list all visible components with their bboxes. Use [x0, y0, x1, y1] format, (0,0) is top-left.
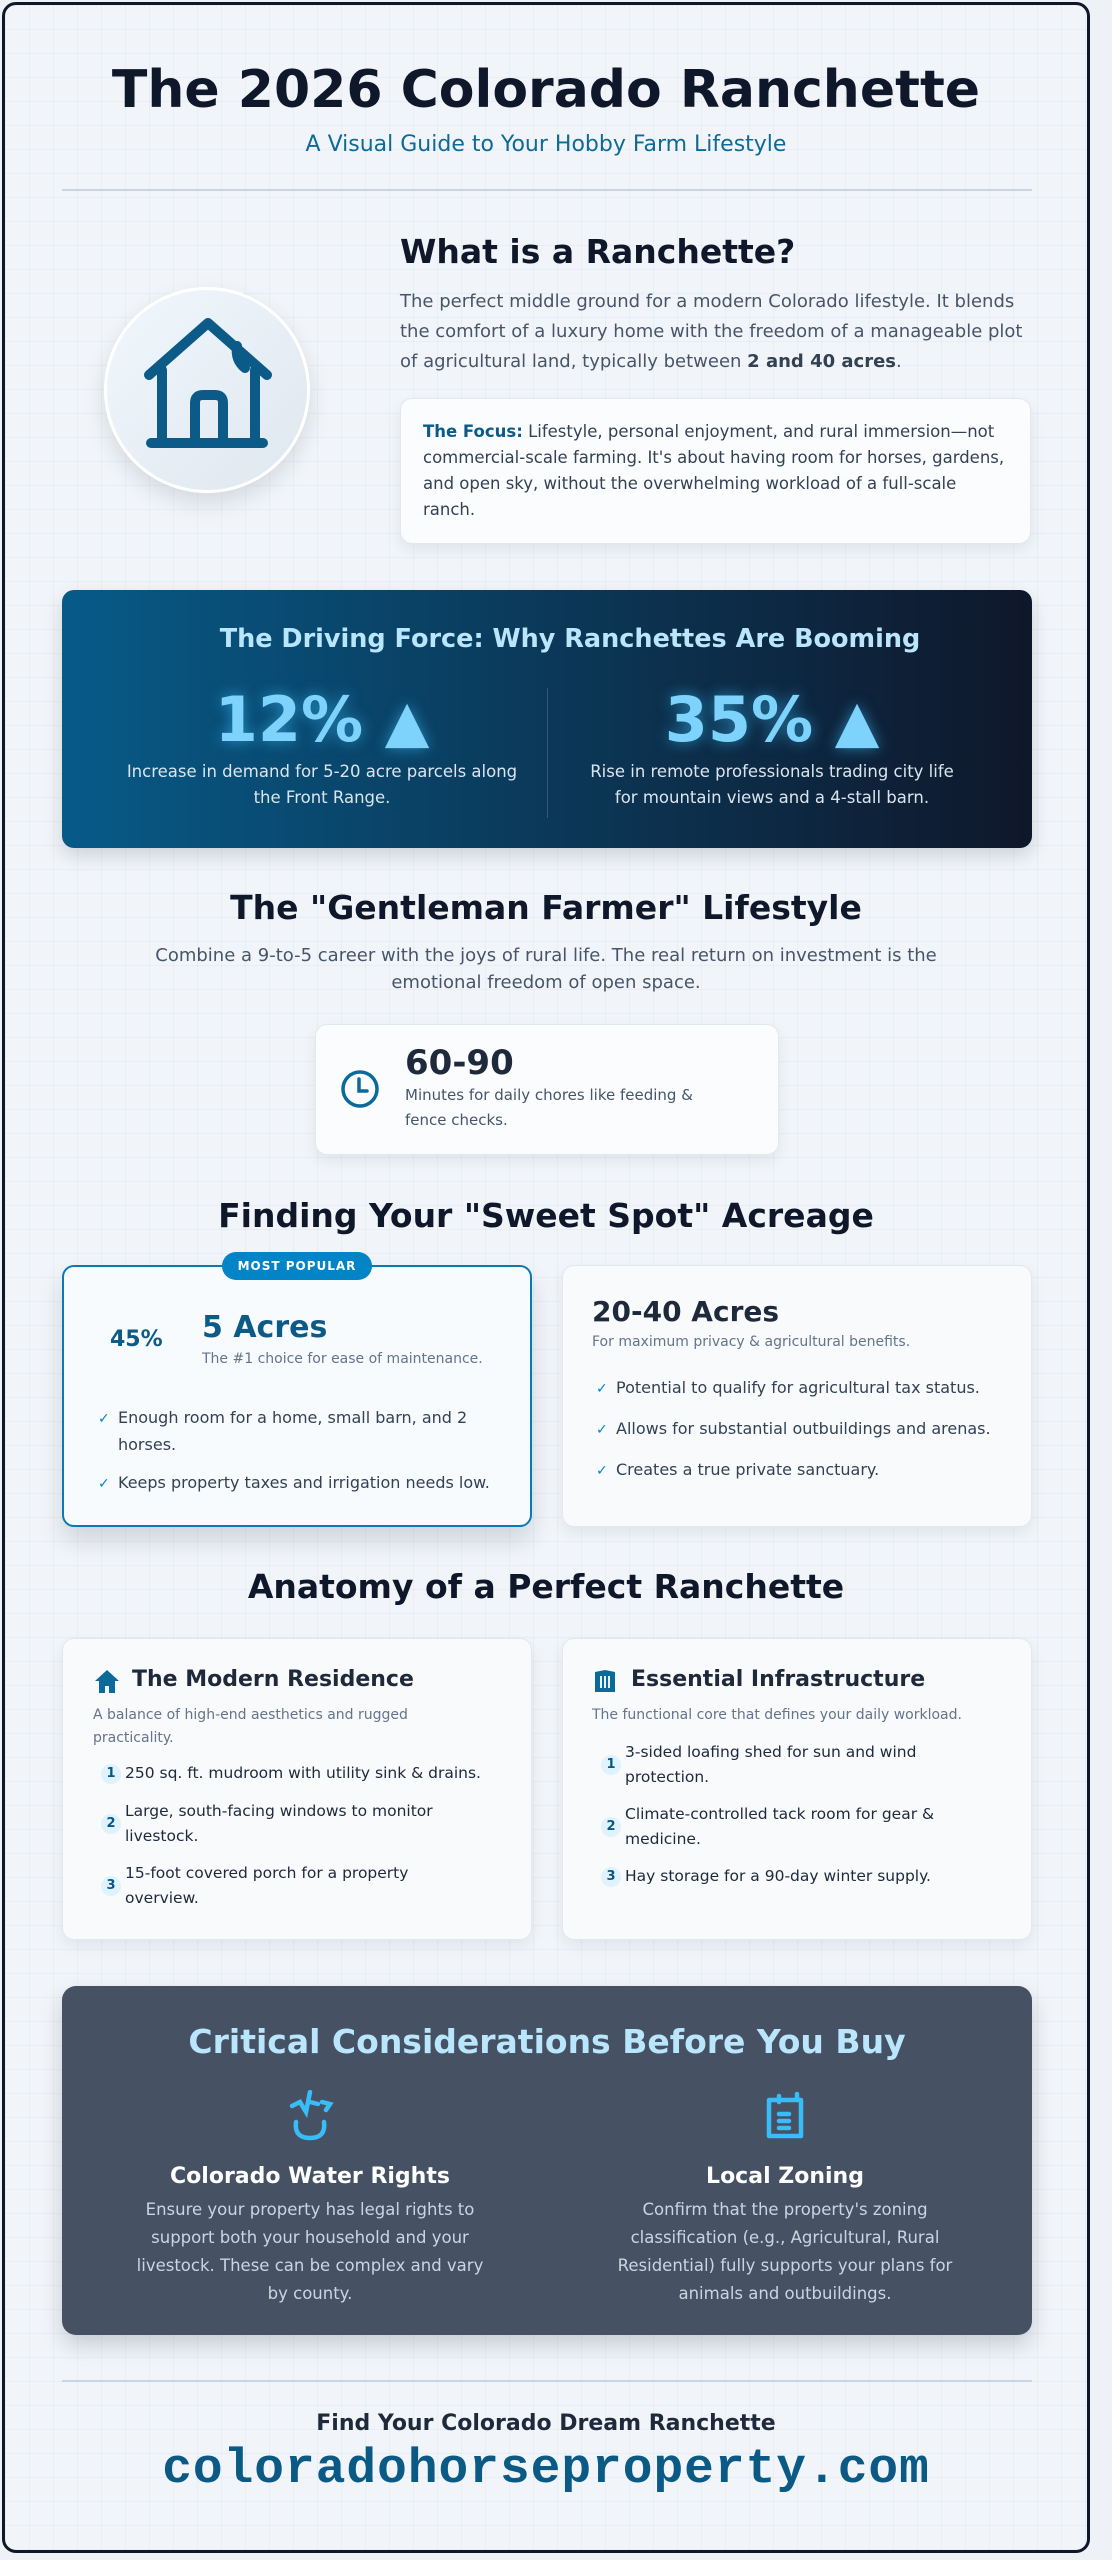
stat: 35%: 35% ▲ — [665, 683, 879, 756]
stat: 35% — [590, 683, 954, 807]
card: 20-40 acres: ✓ — [596, 1422, 608, 1438]
callout: the focus — [400, 398, 1031, 544]
card: 5 acres — [62, 1265, 532, 1527]
text: gentleman farmer: Combine a 9-to-5 career with the joys of rural life. The real return on investment is the emotional freedom of open space. — [155, 945, 937, 993]
stat: 35%: for mountain views and a 4-stall barn. — [615, 788, 929, 807]
icon: house small — [95, 1670, 119, 1693]
card: modern residence: 1 — [106, 1766, 116, 1781]
card: essential infrastructure: 1 — [606, 1757, 616, 1772]
icon: clock — [341, 1070, 379, 1108]
card: essential infrastructure: The functional core that defines your daily workload. — [592, 1707, 962, 1723]
card: 5 acres: 45% — [110, 1327, 163, 1352]
card: 20-40 acres — [562, 1265, 1032, 1527]
card: chores stat — [315, 1024, 779, 1155]
card: essential infrastructure: 3 — [606, 1869, 616, 1884]
card: essential infrastructure: 3-sided loafing shed for sun and wind protection. — [625, 1743, 916, 1786]
card: modern residence: The Modern Residence — [132, 1667, 414, 1692]
card: chores stat: Minutes for daily chores like feeding & fence checks. — [405, 1086, 693, 1129]
column: local zoning — [618, 2092, 952, 2303]
icon: water — [290, 2090, 334, 2140]
column: local zoning: Confirm that the property's zoning classification (e.g., Agricultural, Rural Residential) fully supports your plans for animals and outbuildings. — [618, 2200, 952, 2303]
card: modern residence: 250 sq. ft. mudroom with utility sink & drains. — [125, 1764, 481, 1782]
icon: house circle — [104, 287, 310, 493]
callout: the focus: The Focus: Lifestyle, personal enjoyment, and rural immersion—not commercial-scale farming. It's about having room for horses, gardens, and open sky, without the overwhelming workload of a full-scale ranch. — [423, 422, 1004, 519]
text: definition: The perfect middle ground for a modern Colorado lifestyle. It blends the comfort of a luxury home with the freedom of a manageable plot of agricultural land, typically between 2 and 40 acres. — [400, 291, 1022, 372]
card: 20-40 acres: Creates a true private sanctuary. — [616, 1460, 879, 1479]
column: water rights: Colorado Water Rights — [170, 2164, 450, 2189]
card: 5 acres: 5 Acres — [202, 1310, 327, 1345]
icon: document — [766, 2092, 804, 2138]
card: modern residence: 2 — [106, 1816, 116, 1831]
heading: sweet spot: Finding Your "Sweet Spot" Acreage — [218, 1196, 874, 1235]
card: essential infrastructure: Essential Infrastructure — [631, 1667, 925, 1692]
heading: gentleman farmer: The "Gentleman Farmer" Lifestyle — [230, 888, 862, 927]
stat: 12%: Increase in demand for 5-20 acre parcels along — [127, 762, 517, 781]
panel: critical considerations — [62, 1986, 1032, 2335]
card: 5 acres: ✓ — [98, 1476, 110, 1492]
stat: 12%: the Front Range. — [254, 788, 390, 807]
card: essential infrastructure — [562, 1638, 1032, 1940]
subtitle: A Visual Guide to Your Hobby Farm Lifestyle — [306, 132, 786, 157]
card: chores stat: 60-90 — [405, 1043, 514, 1083]
card: 5 acres: Keeps property taxes and irrigation needs low. — [118, 1473, 490, 1492]
card: essential infrastructure: Hay storage for a 90-day winter supply. — [625, 1867, 931, 1885]
stat: 12%: 12% ▲ — [215, 683, 429, 756]
card: 20-40 acres: Allows for substantial outbuildings and arenas. — [616, 1419, 991, 1438]
heading: what is a ranchette: What is a Ranchette? — [400, 232, 795, 271]
card: 5 acres: The #1 choice for ease of maintenance. — [202, 1351, 483, 1367]
card: 20-40 acres: For maximum privacy & agricultural benefits. — [592, 1334, 910, 1350]
card: essential infrastructure: Climate-controlled tack room for gear & medicine. — [625, 1805, 934, 1848]
footer: url: coloradohorseproperty.com — [162, 2441, 930, 2497]
card: modern residence: A balance of high-end aesthetics and rugged practicality. — [93, 1707, 408, 1746]
footer: call to action: Find Your Colorado Dream Ranchette — [316, 2411, 776, 2436]
heading: driving force: The Driving Force: Why Ranchettes Are Booming — [220, 624, 920, 654]
card: 20-40 acres: ✓ — [596, 1381, 608, 1397]
card: modern residence: Large, south-facing windows to monitor livestock. — [125, 1802, 433, 1845]
column: water rights: Ensure your property has legal rights to support both your household and your livestock. These can be complex and vary by county. — [137, 2200, 483, 2303]
panel: driving force — [62, 590, 1032, 848]
column: water rights — [137, 2090, 483, 2303]
card: 20-40 acres: Potential to qualify for agricultural tax status. — [616, 1378, 980, 1397]
badge: most popular — [222, 1252, 372, 1280]
heading: critical considerations: Critical Considerations Before You Buy — [188, 2022, 906, 2061]
badge: most popular: MOST POPULAR — [238, 1259, 356, 1273]
icon: barn — [595, 1670, 615, 1692]
column: local zoning: Local Zoning — [706, 2164, 864, 2189]
stat: 35%: Rise in remote professionals trading city life — [590, 762, 954, 781]
title: The 2026 Colorado Ranchette — [112, 60, 980, 120]
card: 5 acres: ✓ — [98, 1411, 110, 1427]
card: modern residence: 3 — [106, 1878, 116, 1893]
card: 5 acres: Enough room for a home, small barn, and 2 horses. — [118, 1408, 467, 1454]
card: 20-40 acres: 20-40 Acres — [592, 1295, 779, 1328]
card: modern residence: 15-foot covered porch for a property overview. — [125, 1864, 408, 1907]
stat: 12% — [127, 683, 517, 807]
card: essential infrastructure: 2 — [606, 1819, 616, 1834]
card: 20-40 acres: ✓ — [596, 1463, 608, 1479]
heading: anatomy: Anatomy of a Perfect Ranchette — [248, 1567, 844, 1606]
card: modern residence — [62, 1638, 532, 1940]
